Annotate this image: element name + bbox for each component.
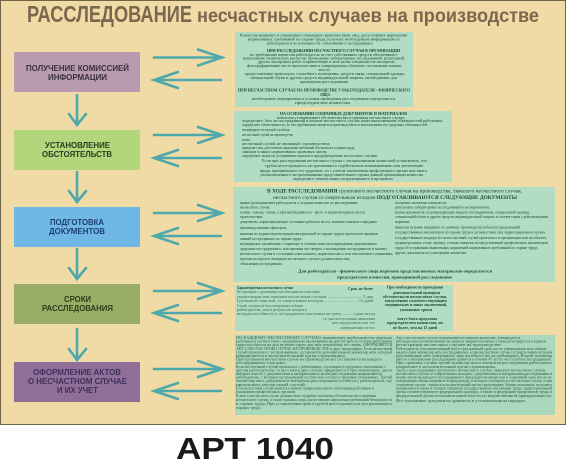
panel: commission information: ПРИ РАССЛЕДОВАНИИ НЕСЧАСТНОГО СЛУЧАЯ В ОРГАНИЗАЦИИ xyxy=(267,49,400,53)
terms table: завершения этого xyxy=(340,326,375,330)
right reports column: несчастного случая со смертельным исходом с документами и материалами расследования и xyxy=(396,372,552,376)
step 4: investigation terms: РАССЛЕДОВАНИЯ xyxy=(42,304,113,313)
right document list: специальной обуви и других средств индивидуальной защиты в соответствии с действующими xyxy=(395,215,548,219)
right reports column xyxy=(396,336,553,403)
panel: circumstances established: Если при расследовании несчастного случая с застрахованным комиссией установлено, что xyxy=(262,159,427,164)
panel: commission information: выполнение технических расчетов, проведение лабораторных исследований, испытаний, xyxy=(243,56,405,62)
arrows: step 2 exchange xyxy=(154,127,222,166)
terms table: или продолжить как это xyxy=(332,321,375,325)
extension note: председателем комиссии, но xyxy=(387,321,443,325)
panel: circumstances established: законов и иных нормативных правовых актов; xyxy=(242,150,327,154)
right reports column: утверждения обязан направить в прокуратуру, в которую сообщалось о несчастном случае, а при xyxy=(396,379,552,384)
terms table: работодателю, или в результате которого xyxy=(237,308,307,313)
left reports column: экземпляр акта, документы и материалы расследования остаются у работодателя, где xyxy=(236,379,392,384)
left reports column: работодателю, с которым пострадавший состоит или состоял в трудовых отношениях. Третий xyxy=(236,376,392,381)
right document list: результаты лабораторных исследований и экспериментов; xyxy=(395,206,490,210)
panel: investigation terms xyxy=(235,285,453,331)
panel: circumstances established: определяет объективность, за что пребывание является производством и исполнением его трудовых обязанностей xyxy=(242,123,427,128)
right document list: копии документов, подтверждающих выдачу пострадавшему специальной одежды, xyxy=(395,210,530,216)
right document list: другие документы по усмотрению комиссии. xyxy=(395,251,467,255)
right reports column: копии актов на каждого пострадавшего председатель комиссии в 3-дневный срок после их xyxy=(396,376,552,380)
terms table: Не связанных с групповыми и не относящиеся к категории xyxy=(237,290,320,294)
terms table: Случай, о котором не было своевременно сообщено xyxy=(237,304,303,309)
panel: commission information: председателем комиссии xyxy=(295,101,350,105)
panel heading: documents xyxy=(267,190,522,201)
panel: circumstances established: определяет степень вины застрахованного в процентах xyxy=(293,177,393,181)
panel: commission information: по требованию комиссии работодатель за счет собственных средств обеспечивает: xyxy=(250,53,398,57)
panel: circumstances established: несчастный случай, не связанный с производством; xyxy=(242,142,330,147)
panel: commission information: работодателя и по возможности - объяснения от пострадавшего xyxy=(267,42,373,46)
arrow: step 3 to 4 xyxy=(69,249,86,279)
left document list xyxy=(240,201,393,266)
right reports column: выдать один экземпляр акта пострадавшему, а при несчастном случае со смертельным исходом xyxy=(396,350,553,355)
left reports column: направляется в исполнительный орган страховщика. xyxy=(236,354,346,358)
right document list: подконтрольных этому органу), а также выписки из представлений профсоюзных инспекторов xyxy=(395,241,548,246)
right reports column: При страховых случаях третий экземпляр акта и материалы расследования работодатель xyxy=(396,361,552,365)
arrows: step 5 exchange xyxy=(154,361,222,399)
left document list: несчастного случая в состоянии алкогольного, наркотического или токсического опьянения; xyxy=(240,252,393,257)
arrows: step 3 exchange xyxy=(154,205,222,244)
right reports column: направляет в исполнительный орган страховщика. xyxy=(396,365,496,369)
left document list: документы, характеризующие состояние рабочего места, наличие опасных и вредных xyxy=(240,220,377,225)
title xyxy=(27,1,539,27)
step 1: receiving information xyxy=(14,52,140,92)
left reports column: и охраны труда. При установлении факта грубой неосторожности застрахованного xyxy=(236,402,392,406)
step 1: receiving information: ПОЛУЧЕНИЕ КОМИССИЕЙ xyxy=(26,64,129,73)
panel: commission information: необходимые мероприятия и условия проведения расследования определяются xyxy=(252,97,395,101)
left reports column: произошел несчастный случай. xyxy=(236,383,306,387)
panel: circumstances established: определяет меры по устранению причин и предупреждению несчастных случаев. xyxy=(242,154,378,158)
left reports column: которых вместе с документами и материалами и актом расследования направляются xyxy=(236,372,382,376)
panel: circumstances established xyxy=(234,111,452,182)
step 3: preparing documents xyxy=(14,207,140,247)
arrow: step 4 to 5 xyxy=(69,329,86,360)
terms table: смертельным или тяжелым несчастным случаям ................................ 3 дня xyxy=(237,295,373,299)
panel: circumstances established: определяет лиц, допустивших нарушения требований безопасности и охраны труда, xyxy=(242,146,355,151)
step 4: investigation terms: СРОКИ xyxy=(64,295,91,304)
left reports column: Если несчастный случай произошел с работником, состоящим в трудовых отношениях с xyxy=(236,365,386,370)
left document list: здоровью пострадавшего, или причине его смерти, о нахождении пострадавшего в момент xyxy=(240,247,387,252)
panel heading: documents: несчастного случая со смертельным исходом ПОДГОТАВЛИВАЮТСЯ СЛЕДУЮЩИЕ ДОКУМЕНТЫ xyxy=(273,196,517,201)
panel: circumstances established: несчастный случай на производстве xyxy=(242,133,293,137)
left document list: планы, эскизы, схемы, а при необходимости - фото- и видеоматериалы места xyxy=(240,210,365,216)
extension note: обстоятельств несчастного случая, xyxy=(383,295,447,299)
title: РАССЛЕДОВАНИЕ xyxy=(27,1,192,27)
left reports column: работника в соответствии с медицинским заключением на другую работу, потерю работником xyxy=(236,340,393,345)
panel: circumstances established: НА ОСНОВАНИИ СОБРАННЫХ ДОКУМЕНТОВ И МАТЕРИАЛОВ xyxy=(280,112,407,116)
panel: commission information: ПРИ НЕСЧАСТНОМ СЛУЧАЕ НА ПРОИЗВОДСТВЕ У РАБОТОДАТЕЛЯ - ФИЗИЧЕСКОГО xyxy=(238,88,410,92)
panel heading: documents: В ХОДЕ РАССЛЕДОВАНИЯ группового несчастного случая на производстве, тяжелого несчастного случая, xyxy=(267,190,522,194)
extension note: указанные сроки xyxy=(400,308,433,312)
extension note xyxy=(383,286,447,330)
left reports column: указанием профсоюзных органов. xyxy=(236,390,296,394)
left document list: приказ (распоряжение) работодателя о создании комиссии по расследованию xyxy=(240,201,358,205)
title: несчастных случаев на производстве xyxy=(197,6,539,27)
panel: documents to prepare xyxy=(233,187,555,282)
step 2: establishing circumstances: УСТАНОВЛЕНИЕ xyxy=(45,141,111,150)
step 3: preparing documents: ДОКУМЕНТОВ xyxy=(49,227,105,236)
extension note: медицинских и иных заключений, xyxy=(385,303,447,307)
right reports column: родственникам либо доверенному лицу погибшего (по их требованию). Второй экземпляр xyxy=(396,354,552,358)
panel: circumstances established: комиссия устанавливает обстоятельства и причины несчастного случая, xyxy=(277,116,405,121)
panel: circumstances established: уполномоченного застрахованными представительного органа данной организации комиссия xyxy=(260,173,423,177)
note: employer individual: Для работодателя - физического лица перечень представляемых материалов определяется xyxy=(298,270,492,274)
left reports column: охраны труда. xyxy=(236,406,261,410)
step 5: drawing up reports: ОФОРМЛЕНИЕ АКТОВ xyxy=(33,368,121,377)
panel: commission information: фотографирование места происшествия и поврежденных объектов, составление планов, xyxy=(247,64,402,69)
arrow: step 1 to 2 xyxy=(69,95,86,125)
panel: commission information: проведения расследования xyxy=(300,80,348,84)
extension note: дополнительной проверки xyxy=(393,291,441,295)
right reports column: орган соответствующего федерального надзора, а также в федерацию профсоюзов труда и xyxy=(396,390,552,395)
right reports column: работодателем (уполномоченным им лицом) и заверяется печатью, а также регистрируется в журнале xyxy=(396,340,546,345)
left reports column: АКТ О НЕСЧАСТНОМ СЛУЧАЕ НА ПРОИЗВОДСТВЕ в двух экземплярах. Если несчастный xyxy=(236,347,392,351)
left reports column: другим работодателем, то акт о нем в двух случаях оформляется в трех экземплярах, два из xyxy=(236,368,393,373)
right reports column: Все указанные документы хранятся в установленном порядке. xyxy=(396,399,526,403)
panel: circumstances established: или xyxy=(242,138,250,142)
right document list: экспертные заключения специалистов; xyxy=(395,201,447,205)
step 2: establishing circumstances: ОБСТОЯТЕЛЬСТВ xyxy=(42,150,112,159)
arrow: step 2 to 3 xyxy=(69,172,86,202)
terms table: Групповой, тяжелый, со смертельным исходом ............................... 15 дней xyxy=(237,299,373,304)
terms table: со дня поступления заявления xyxy=(323,317,375,321)
step 4: investigation terms xyxy=(14,284,140,324)
left reports column: случай произошел с застрахованным, составляется дополнительный экземпляр акта, который xyxy=(236,350,392,355)
left reports column: пострадавшего отдельно. xyxy=(236,361,286,365)
panel: reports xyxy=(235,335,555,415)
panel: commission information: предоставление транспорта, служебного помещения, средств связи, специальной одежды, xyxy=(245,72,405,77)
terms table: Характеристика несчастного случая xyxy=(237,286,293,290)
panel: circumstances established: вреда, причиненного его здоровью, то с учетом заключения профсоюзного органа или иного xyxy=(260,169,427,174)
panel: commission information: Комиссия выявляет и опрашивает очевидцев происшествия, лиц, допустивших нарушения xyxy=(240,34,407,38)
left document list: выписки из журналов регистрации инструктажей по охране труда и протоколов проверки xyxy=(240,232,378,236)
left reports column: В акте о несчастном случае должны быть подробно изложены обстоятельства и причины xyxy=(236,394,377,398)
right reports column: направляются также в соответствующую государственную инспекцию труда, территориальный xyxy=(396,386,552,391)
arrows: step 1 exchange xyxy=(154,50,222,88)
panel: circumstances established: квалифицирует несчастный случай как: xyxy=(242,128,290,132)
left document list: протоколы опросов очевидцев несчастного случая и должностных лиц; xyxy=(240,257,350,261)
terms table: Срок, не более xyxy=(348,287,373,291)
left document list: происшествия; xyxy=(240,215,263,219)
step 5: drawing up reports xyxy=(14,362,140,402)
panel: circumstances established: определяет: был ли пострадавший в момент несчастного случая занят выполнением обязанностей работника, xyxy=(242,119,443,124)
step 5: drawing up reports: О НЕСЧАСТНОМ СЛУЧАЕ xyxy=(28,377,128,386)
panel: circumstances established: грубая неосторожность застрахованного содействовала возникновению или увеличению xyxy=(265,164,423,168)
left document list: медицинское заключение о характере и степени тяжести повреждения, причиненного xyxy=(240,242,377,247)
right reports column: Работодатель (уполномоченный им) в трехдневный срок после утверждения акта обязан xyxy=(396,347,546,351)
panel: commission information: нормативных требований по охране труда, получает необходимую информацию от xyxy=(248,38,400,42)
left document list: несчастного случая; xyxy=(240,206,270,210)
right reports column: Акт о несчастном случае подписывается членами комиссии, утверждается xyxy=(396,336,520,341)
left reports column: Если несчастный случай является в момент профессионального заболевания работником и xyxy=(236,386,374,390)
panel: commission information xyxy=(235,32,413,107)
panel: commission information: других экспертных работ и привлечение в этих целях специалистов-экспертов; xyxy=(258,60,395,64)
right document list xyxy=(395,201,548,255)
left reports column xyxy=(236,336,393,410)
step 2: establishing circumstances xyxy=(14,130,140,170)
right reports column: страховом случае - также в исполнительный орган страховщика. Копии указанных получают xyxy=(396,383,552,387)
step 5: drawing up reports: И ИХ УЧЕТ xyxy=(57,386,98,395)
left reports column: трудоспособности на срок не менее одного дня либо повлекшему его смерть, ОФОРМЛЯЕТСЯ xyxy=(236,343,393,348)
right document list: выписки из ранее выданных по данному производству (объекту) предписаний xyxy=(395,226,520,230)
left document list: объяснения пострадавших; xyxy=(240,262,283,266)
left document list: производственных факторов; xyxy=(240,226,287,230)
terms table: нетрудоспособность у пострадавшего наступила не сразу.............один месяц xyxy=(237,312,375,316)
panel: commission information: эскизов, схем; xyxy=(318,68,330,73)
right reports column: Акты о расследовании группового несчастного случая, тяжелого несчастного случая, xyxy=(396,368,546,373)
note: employer individual: председателем комиссии, проводившей расследование xyxy=(337,276,452,280)
panel: commission information: ЛИЦА xyxy=(320,93,330,97)
left reports column: несчастного случая, а также указаны лица, допустившие нарушения требований безопасности xyxy=(236,398,392,403)
panel: commission information: специальной обуви и других средств индивидуальной защиты, необходимых для xyxy=(250,76,397,81)
left document list: знаний пострадавших по охране труда; xyxy=(240,237,302,241)
right reports column: вместе с материалами расследования хранится в течение 45 лет по месту работы пострадавшего. xyxy=(396,358,552,362)
extension note: получения соответствующих xyxy=(385,299,447,303)
extension note: могут быть продлены xyxy=(397,317,437,321)
step 1: receiving information: ИНФОРМАЦИИ xyxy=(48,73,107,82)
left reports column: ПО КАЖДОМУ НЕСЧАСТНОМУ СЛУЧАЮ, вызвавшему необходимость перевода xyxy=(236,336,392,341)
arrows: step 4 exchange xyxy=(154,283,222,321)
right reports column: федеральный орган исполнительной власти по ведомственной принадлежности. xyxy=(396,394,552,398)
extension note: При необходимости проведения xyxy=(387,286,443,290)
extension note: не более, чем на 15 дней xyxy=(393,326,438,330)
right document list: нормами; xyxy=(395,220,410,224)
right document list: государственных инспекторов по охране труда и должностных лиц территориального органа xyxy=(395,230,545,234)
right document list: государственного надзора (если несчастный случай произошел в организации или на объекте, xyxy=(395,236,547,241)
step 3: preparing documents: ПОДГОТОВКА xyxy=(50,218,104,227)
note: employer individual xyxy=(298,270,492,280)
left reports column: При групповом несчастном случае на производстве акт составляется на каждого xyxy=(236,358,382,362)
terms table xyxy=(237,286,375,330)
right reports column: регистрации несчастных случаев на производстве. xyxy=(396,343,502,347)
right document list: труда об устранении выявленных нарушений нормативных требований по охране труда; xyxy=(395,246,538,250)
